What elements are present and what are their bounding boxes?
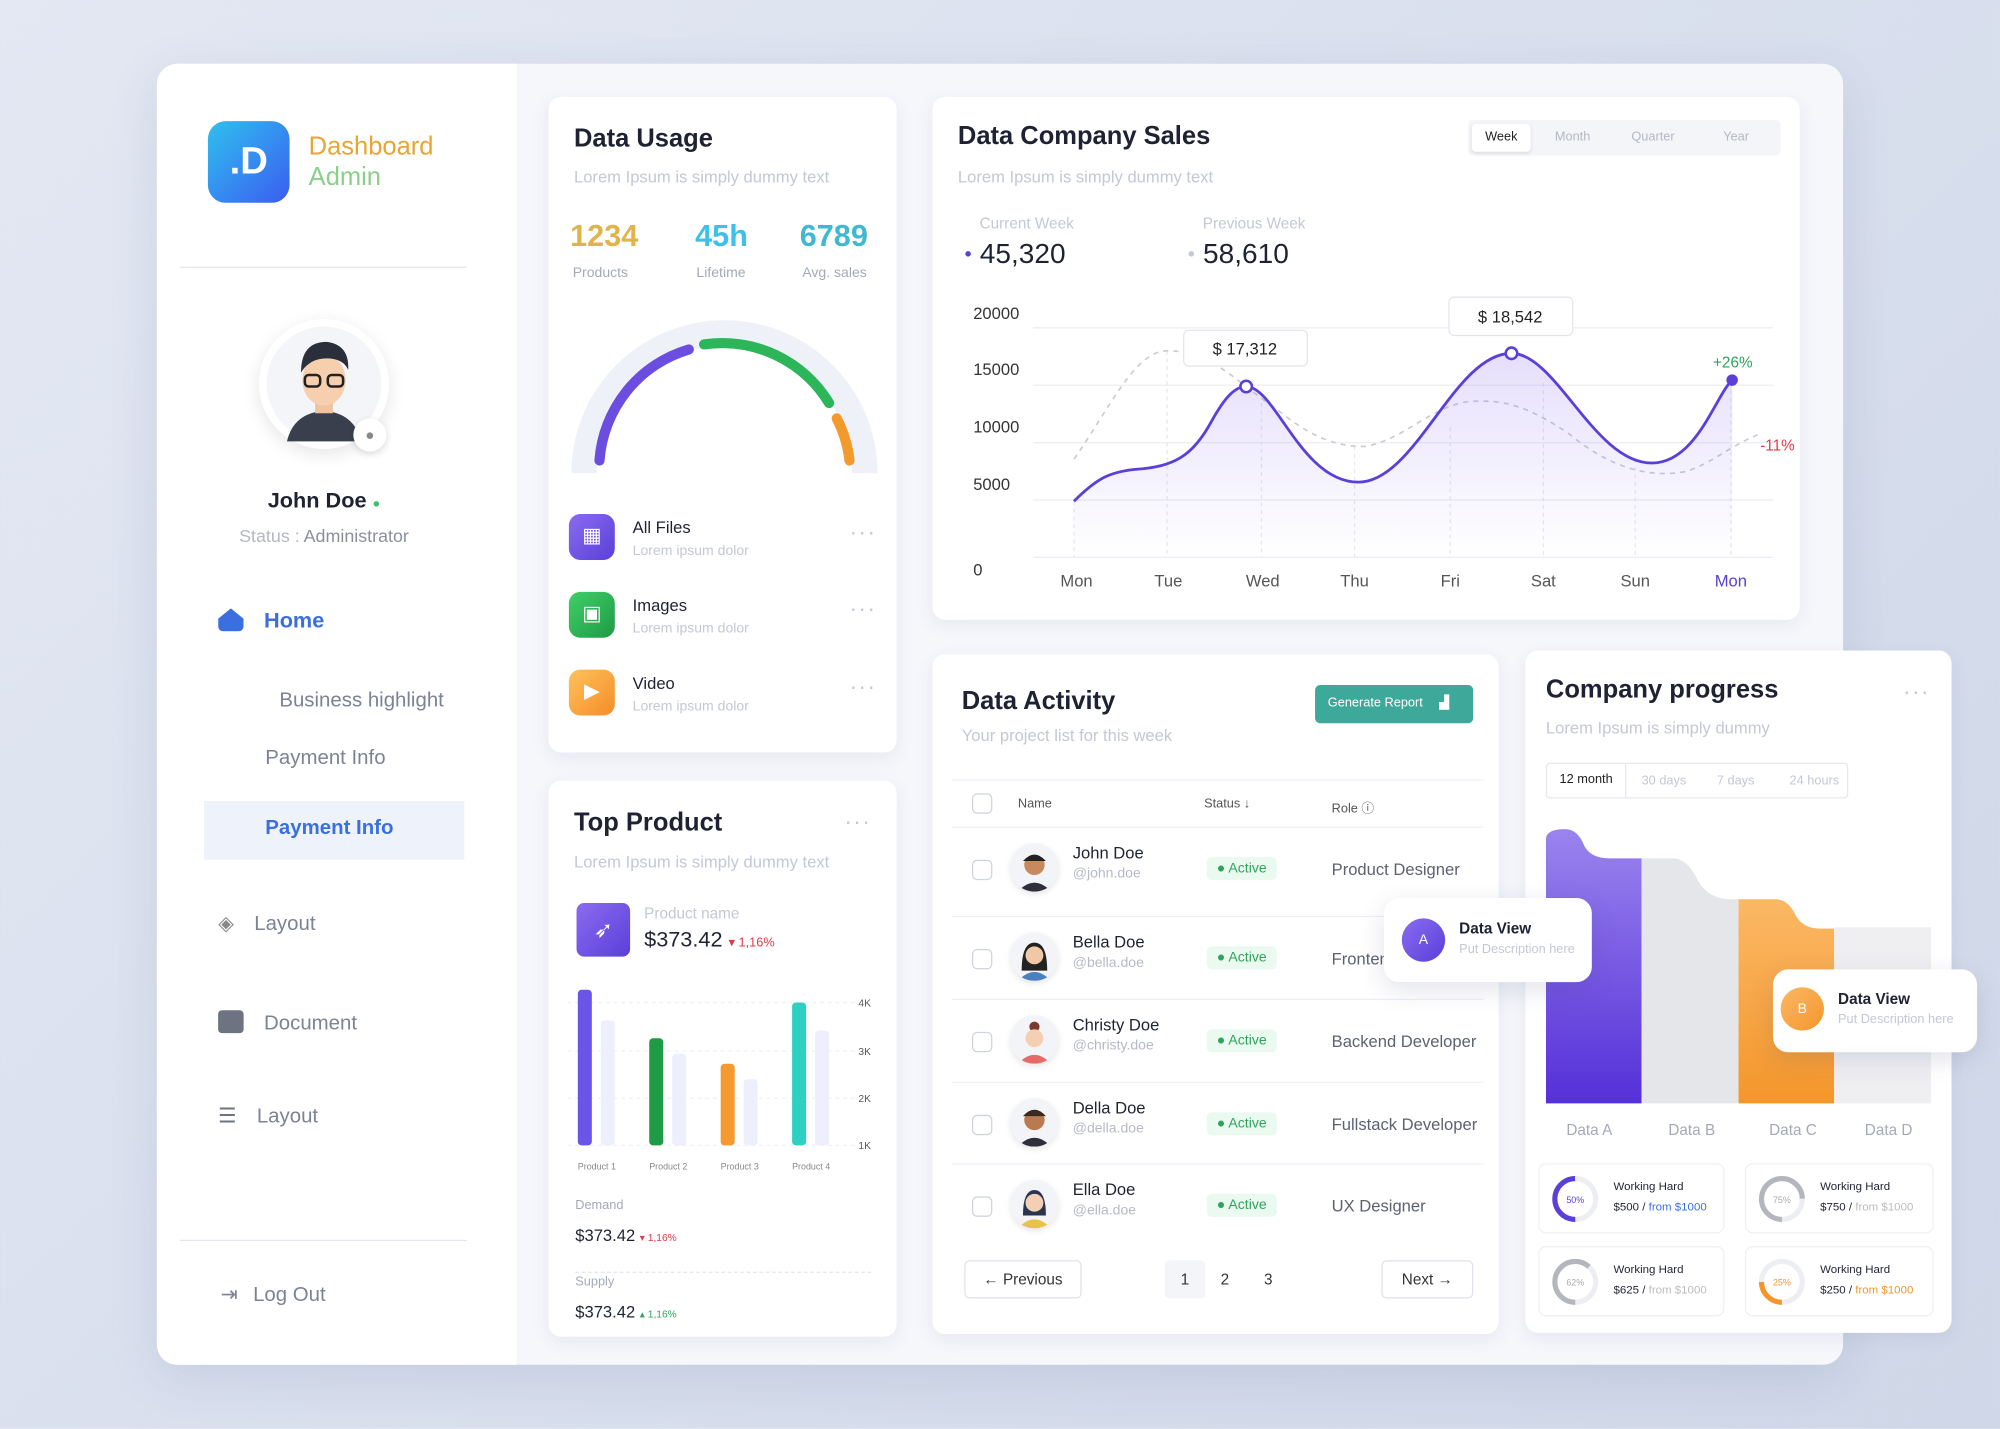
- file list: Lorem ipsum dolor: [633, 621, 749, 636]
- card: company progress: Data A: [1566, 1121, 1612, 1139]
- card: data activity: Bella Doe: [1073, 932, 1145, 952]
- progress mini cards: Working Hard: [1614, 1263, 1683, 1276]
- main panel: [157, 64, 1843, 1365]
- nav home: [218, 608, 324, 633]
- progress mini cards: $250 / from $1000: [1820, 1283, 1913, 1296]
- tabs: 7 days: [1717, 774, 1754, 788]
- logo text: Dashboard: [309, 133, 433, 161]
- card: data activity: Ella Doe: [1073, 1180, 1135, 1199]
- tabs: Year: [1723, 130, 1749, 144]
- card: data activity: @ella.doe: [1073, 1203, 1136, 1218]
- nav payment active: Payment Info: [265, 818, 393, 839]
- table header: Role ⓘ: [1332, 802, 1374, 816]
- progress mini cards: 50%: [1566, 1195, 1584, 1205]
- line chart: Mon: [1060, 572, 1093, 591]
- card: data activity: Della Doe: [1073, 1098, 1146, 1117]
- line chart: Tue: [1154, 572, 1182, 591]
- callout: data view A: [1384, 898, 1592, 982]
- file list: Lorem ipsum dolor: [633, 699, 749, 714]
- callout: data view A: A: [1419, 932, 1428, 948]
- card: top product: ···: [844, 809, 871, 834]
- card: top product: Top Product: [574, 809, 722, 837]
- tabs: 24 hours: [1790, 774, 1839, 788]
- logo text: [308, 133, 433, 191]
- line chart: 5000: [973, 475, 1010, 494]
- avatar: [259, 319, 389, 449]
- previous week: Previous Week: [1203, 214, 1305, 232]
- demand: $373.42 ▾ 1,16%: [575, 1226, 677, 1245]
- card: data activity: @della.doe: [1073, 1121, 1144, 1136]
- bar chart: Product 3: [721, 1162, 759, 1172]
- progress mini cards: $750 / from $1000: [1820, 1200, 1913, 1213]
- line chart: -11%: [1760, 437, 1795, 454]
- rows: John Doe: [1073, 843, 1144, 862]
- bar chart: Product 1: [578, 1162, 616, 1172]
- bar chart: 3K: [858, 1047, 871, 1058]
- card: data usage: Lorem Ipsum is simply dummy text: [574, 167, 829, 186]
- progress mini cards: 62%: [1566, 1278, 1584, 1288]
- bar chart: Product 2: [649, 1162, 687, 1172]
- card: data activity: Christy Doe: [1073, 1015, 1159, 1034]
- current week: ● 45,320: [964, 237, 1066, 269]
- nav layout: ◈ Layout: [218, 913, 316, 935]
- user status: Status : Administrator: [239, 526, 409, 546]
- rows: [952, 827, 1483, 908]
- bar chart: 2K: [858, 1094, 871, 1105]
- progress mini cards: 25%: [1773, 1278, 1791, 1288]
- product price: [644, 904, 775, 952]
- progress mini cards: $500 / from $1000: [1614, 1200, 1707, 1213]
- stats: Products: [573, 265, 628, 281]
- callout: data view B: [1773, 969, 1977, 1052]
- line chart: Wed: [1246, 572, 1280, 591]
- card: top product: [548, 781, 897, 1337]
- card: company progress: Company progress: [1546, 676, 1778, 704]
- file list: ▶: [584, 681, 600, 703]
- stats: Lifetime: [696, 265, 746, 281]
- callout: data view B: B: [1798, 1001, 1807, 1017]
- product price: $373.42 ▾ 1,16%: [644, 927, 775, 952]
- rows: ● Active: [1217, 861, 1267, 876]
- generate report button: Generate Report ▟: [1328, 696, 1449, 710]
- card: company progress: Data C: [1769, 1121, 1817, 1139]
- logo text: Admin: [309, 163, 381, 191]
- current week: [964, 214, 1074, 269]
- file list: ···: [849, 519, 876, 545]
- bar chart: [568, 990, 871, 1172]
- tabs: [1546, 763, 1848, 798]
- card: data activity: ● Active: [1217, 1116, 1267, 1131]
- tabs: 12 month: [1559, 773, 1613, 787]
- stats: 45h: [695, 219, 748, 254]
- pagination: [964, 1260, 1474, 1298]
- card: sales: Lorem Ipsum is simply dummy text: [958, 167, 1213, 186]
- line chart: 0: [973, 560, 982, 579]
- card: data usage: Data Usage: [574, 125, 713, 153]
- bar chart: 4K: [858, 998, 871, 1009]
- line chart: $ 18,542: [1478, 308, 1542, 327]
- tabs: Week: [1485, 130, 1517, 144]
- line chart: 15000: [973, 360, 1019, 379]
- card: data activity: @bella.doe: [1073, 955, 1144, 971]
- pagination: 2: [1221, 1270, 1229, 1288]
- line chart: 20000: [973, 304, 1019, 323]
- nav payment: Payment Info: [265, 747, 386, 769]
- card: sales: [932, 97, 1800, 620]
- card: company progress: Lorem Ipsum is simply dummy: [1546, 718, 1770, 737]
- tabs: Quarter: [1631, 130, 1675, 144]
- tabs: [1468, 120, 1781, 156]
- card: data activity: [932, 654, 1499, 1334]
- table header: Status ↓: [1204, 797, 1250, 811]
- progress mini cards: $625 / from $1000: [1614, 1283, 1707, 1296]
- card: data activity: Fullstack Developer: [1332, 1115, 1477, 1134]
- callout: data view A: Put Description here: [1459, 943, 1575, 957]
- nav business: Business highlight: [279, 690, 444, 712]
- rows: Product Designer: [1332, 860, 1460, 879]
- card: data activity: ● Active: [1217, 950, 1267, 966]
- card: data activity: Your project list for this week: [962, 726, 1172, 745]
- pagination: 3: [1264, 1270, 1273, 1288]
- previous week: ● 58,610: [1187, 237, 1289, 269]
- file list: Lorem ipsum dolor: [633, 543, 749, 559]
- table header: [952, 779, 1483, 827]
- card: sales: Data Company Sales: [958, 122, 1210, 151]
- line chart: Fri: [1441, 572, 1460, 591]
- line chart: Sat: [1531, 572, 1556, 591]
- line chart: $ 17,312: [1213, 340, 1277, 359]
- tabs: Month: [1555, 130, 1590, 144]
- supply: $373.42 ▴ 1,16%: [575, 1302, 677, 1321]
- logo icon: .D: [230, 140, 268, 182]
- generate report button: [1315, 685, 1473, 723]
- logout: ⇥ Log Out: [221, 1284, 326, 1306]
- card: top product: Lorem Ipsum is simply dummy text: [574, 852, 829, 871]
- product icon: [577, 903, 630, 957]
- file list: Images: [633, 596, 687, 615]
- tabs: 30 days: [1642, 774, 1686, 788]
- gauge: [572, 320, 878, 473]
- stats: 6789: [800, 219, 868, 254]
- table header: Name: [1018, 797, 1052, 811]
- pagination: 1: [1181, 1270, 1189, 1288]
- stats: 1234: [570, 219, 638, 254]
- pagination: Next →: [1402, 1270, 1453, 1288]
- callout: data view B: Put Description here: [1838, 1013, 1954, 1027]
- nav payment active: [204, 801, 464, 860]
- product price: Product name: [644, 904, 739, 922]
- file list: [568, 514, 876, 716]
- callout: data view A: Data View: [1459, 920, 1531, 937]
- file list: ···: [849, 673, 876, 699]
- bar chart: Product 4: [792, 1162, 830, 1172]
- bar chart: 1K: [858, 1141, 871, 1152]
- logo icon: [208, 121, 290, 203]
- callout: data view B: Data View: [1838, 990, 1910, 1008]
- card: data activity: Backend Developer: [1332, 1032, 1476, 1051]
- product icon: ➶: [594, 917, 613, 943]
- file list: ▦: [582, 526, 601, 547]
- progress mini cards: Working Hard: [1820, 1263, 1890, 1276]
- progress mini cards: Working Hard: [1614, 1180, 1683, 1193]
- card: company progress: Data D: [1865, 1121, 1912, 1139]
- supply: Supply: [575, 1276, 614, 1290]
- line chart: 10000: [973, 417, 1019, 436]
- data labels: [1566, 1121, 1912, 1139]
- file list: ▣: [582, 603, 601, 625]
- pagination: ← Previous: [983, 1270, 1063, 1288]
- stats: [570, 219, 868, 281]
- stats: Avg. sales: [802, 265, 867, 281]
- line chart: Thu: [1340, 572, 1369, 591]
- card: data activity: @christy.doe: [1073, 1038, 1154, 1054]
- nav document: Document: [264, 1013, 357, 1034]
- progress mini cards: 75%: [1773, 1195, 1791, 1205]
- line chart: [973, 296, 1795, 591]
- line chart: +26%: [1713, 354, 1753, 371]
- nav layout 2: ☰ Layout: [218, 1106, 318, 1128]
- card: data activity: Frontend: [1332, 949, 1398, 968]
- demand: Demand: [575, 1199, 623, 1213]
- card: data activity: ● Active: [1217, 1033, 1267, 1048]
- card: data activity: UX Designer: [1332, 1196, 1426, 1216]
- card: company progress: Data B: [1668, 1121, 1715, 1139]
- file list: Video: [633, 673, 675, 693]
- line chart: Sun: [1620, 572, 1650, 591]
- card: data activity: Data Activity: [962, 687, 1115, 716]
- card: data activity: ● Active: [1217, 1198, 1267, 1213]
- sidebar: [157, 64, 517, 1365]
- demand: [575, 1199, 677, 1245]
- nav document: [218, 1010, 357, 1034]
- progress mini cards: Working Hard: [1820, 1180, 1890, 1193]
- avatar: ●: [365, 426, 375, 444]
- card: company progress: [1526, 651, 1952, 1333]
- card: data usage: [548, 97, 897, 753]
- user name: John Doe ●: [268, 489, 380, 513]
- file list: All Files: [633, 518, 691, 537]
- current week: Current Week: [980, 214, 1074, 232]
- rows: @john.doe: [1073, 866, 1141, 881]
- card: company progress: ···: [1903, 679, 1930, 704]
- progress mini cards: [1538, 1163, 1934, 1316]
- supply: [575, 1272, 871, 1321]
- line chart: Mon: [1715, 572, 1747, 591]
- nav home: Home: [264, 608, 324, 633]
- previous week: [1187, 214, 1306, 269]
- file list: ···: [849, 596, 876, 621]
- step chart: [1546, 829, 1931, 1104]
